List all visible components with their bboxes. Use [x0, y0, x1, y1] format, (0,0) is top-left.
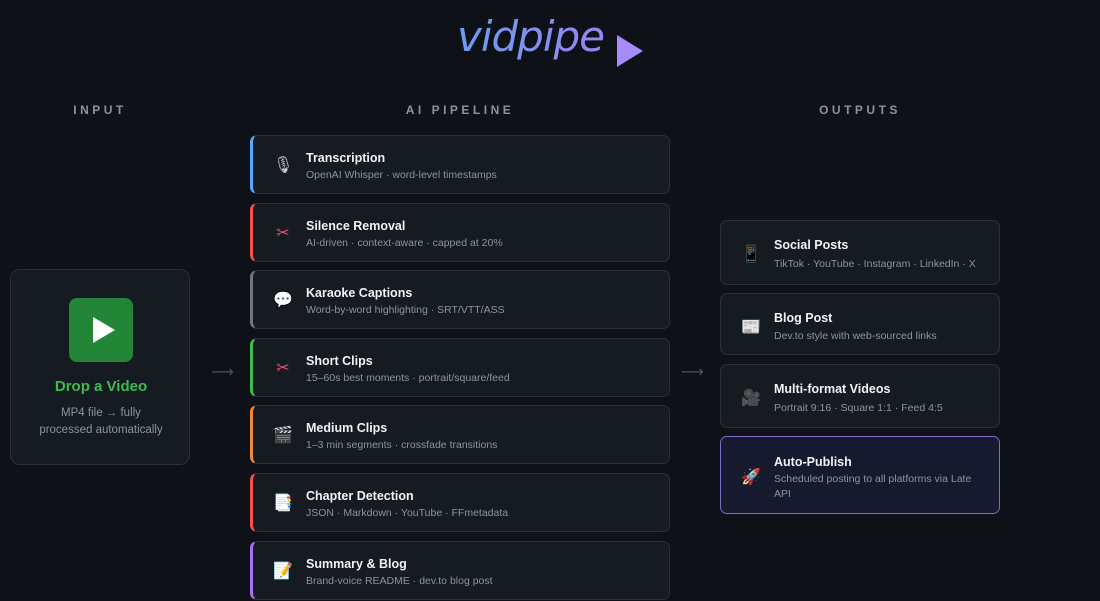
- panel: multi-format videos: Multi-format Videos: [774, 382, 890, 396]
- panel: blog post: Blog Post: [774, 311, 832, 325]
- panel: summary & blog: Summary & Blog: [306, 557, 407, 571]
- panel: karaoke captions: 💬: [273, 290, 293, 309]
- panel: karaoke captions: Word-by-word highlighting · SRT/VTT/ASS: [306, 304, 505, 316]
- panel: short clips: [250, 338, 670, 397]
- panel: chapter detection: [250, 473, 670, 532]
- panel: medium clips: Medium Clips: [306, 421, 387, 435]
- panel: karaoke captions: [250, 270, 670, 329]
- panel: blog post: [720, 293, 1000, 355]
- panel: auto-publish: Auto-Publish: [774, 455, 852, 469]
- panel: short clips: ✂: [276, 358, 290, 377]
- panel: summary & blog: [250, 541, 670, 600]
- panel: summary & blog: Brand-voice README · dev.to blog post: [306, 575, 493, 587]
- panel: karaoke captions: Karaoke Captions: [306, 286, 412, 300]
- panel: medium clips: 1–3 min segments · crossfade transitions: [306, 439, 497, 451]
- panel: input: [10, 269, 190, 465]
- panel: transcription: OpenAI Whisper · word-level timestamps: [306, 169, 497, 181]
- arrow: input to pipeline: ⟶: [211, 364, 234, 381]
- panel: summary & blog: 📝: [273, 561, 293, 580]
- panel: short clips: 15–60s best moments · portrait/square/feed: [306, 372, 510, 384]
- panel: silence removal: [250, 203, 670, 262]
- heading: ai pipeline: AI PIPELINE: [406, 103, 514, 117]
- text: drop a video: Drop a Video: [55, 378, 147, 395]
- panel: social posts: TikTok · YouTube · Instagram · LinkedIn · X: [774, 258, 976, 270]
- panel: transcription: [250, 135, 670, 194]
- panel: chapter detection: 📑: [273, 493, 293, 512]
- panel: multi-format videos: 🎥: [741, 388, 761, 407]
- panel: transcription: Transcription: [306, 151, 385, 165]
- text: description: processed automatically: [39, 424, 163, 436]
- heading: input: INPUT: [73, 103, 127, 117]
- text: description: MP4 file → fully: [61, 407, 141, 419]
- panel: auto-publish: 🚀: [741, 467, 761, 486]
- text: description: [39, 407, 163, 436]
- panel: social posts: [720, 220, 1000, 285]
- title: vidpipe: [457, 12, 604, 61]
- panel: short clips: Short Clips: [306, 354, 373, 368]
- panel: chapter detection: JSON · Markdown · YouTube · FFmetadata: [306, 507, 508, 519]
- panel: multi-format videos: [720, 364, 1000, 428]
- panel: silence removal: AI-driven · context-aware · capped at 20%: [306, 237, 503, 249]
- panel: multi-format videos: Portrait 9:16 · Square 1:1 · Feed 4:5: [774, 402, 943, 414]
- panel: silence removal: ✂: [276, 223, 290, 242]
- heading: outputs: OUTPUTS: [819, 103, 901, 117]
- panel: auto-publish: Scheduled posting to all platforms via Late API: [774, 473, 971, 500]
- panel: social posts: Social Posts: [774, 238, 848, 252]
- icon: play: [69, 298, 133, 362]
- panel: medium clips: [250, 405, 670, 464]
- panel: chapter detection: Chapter Detection: [306, 489, 414, 503]
- panel: medium clips: 🎬: [273, 425, 293, 444]
- panel: social posts: 📱: [741, 244, 761, 263]
- panel: silence removal: Silence Removal: [306, 219, 405, 233]
- panel: blog post: Dev.to style with web-sourced links: [774, 330, 937, 342]
- panel: blog post: 📰: [741, 317, 761, 336]
- panel: auto-publish: [720, 436, 1000, 514]
- arrow: pipeline to outputs: ⟶: [681, 364, 704, 381]
- panel: transcription: 🎙: [273, 155, 293, 174]
